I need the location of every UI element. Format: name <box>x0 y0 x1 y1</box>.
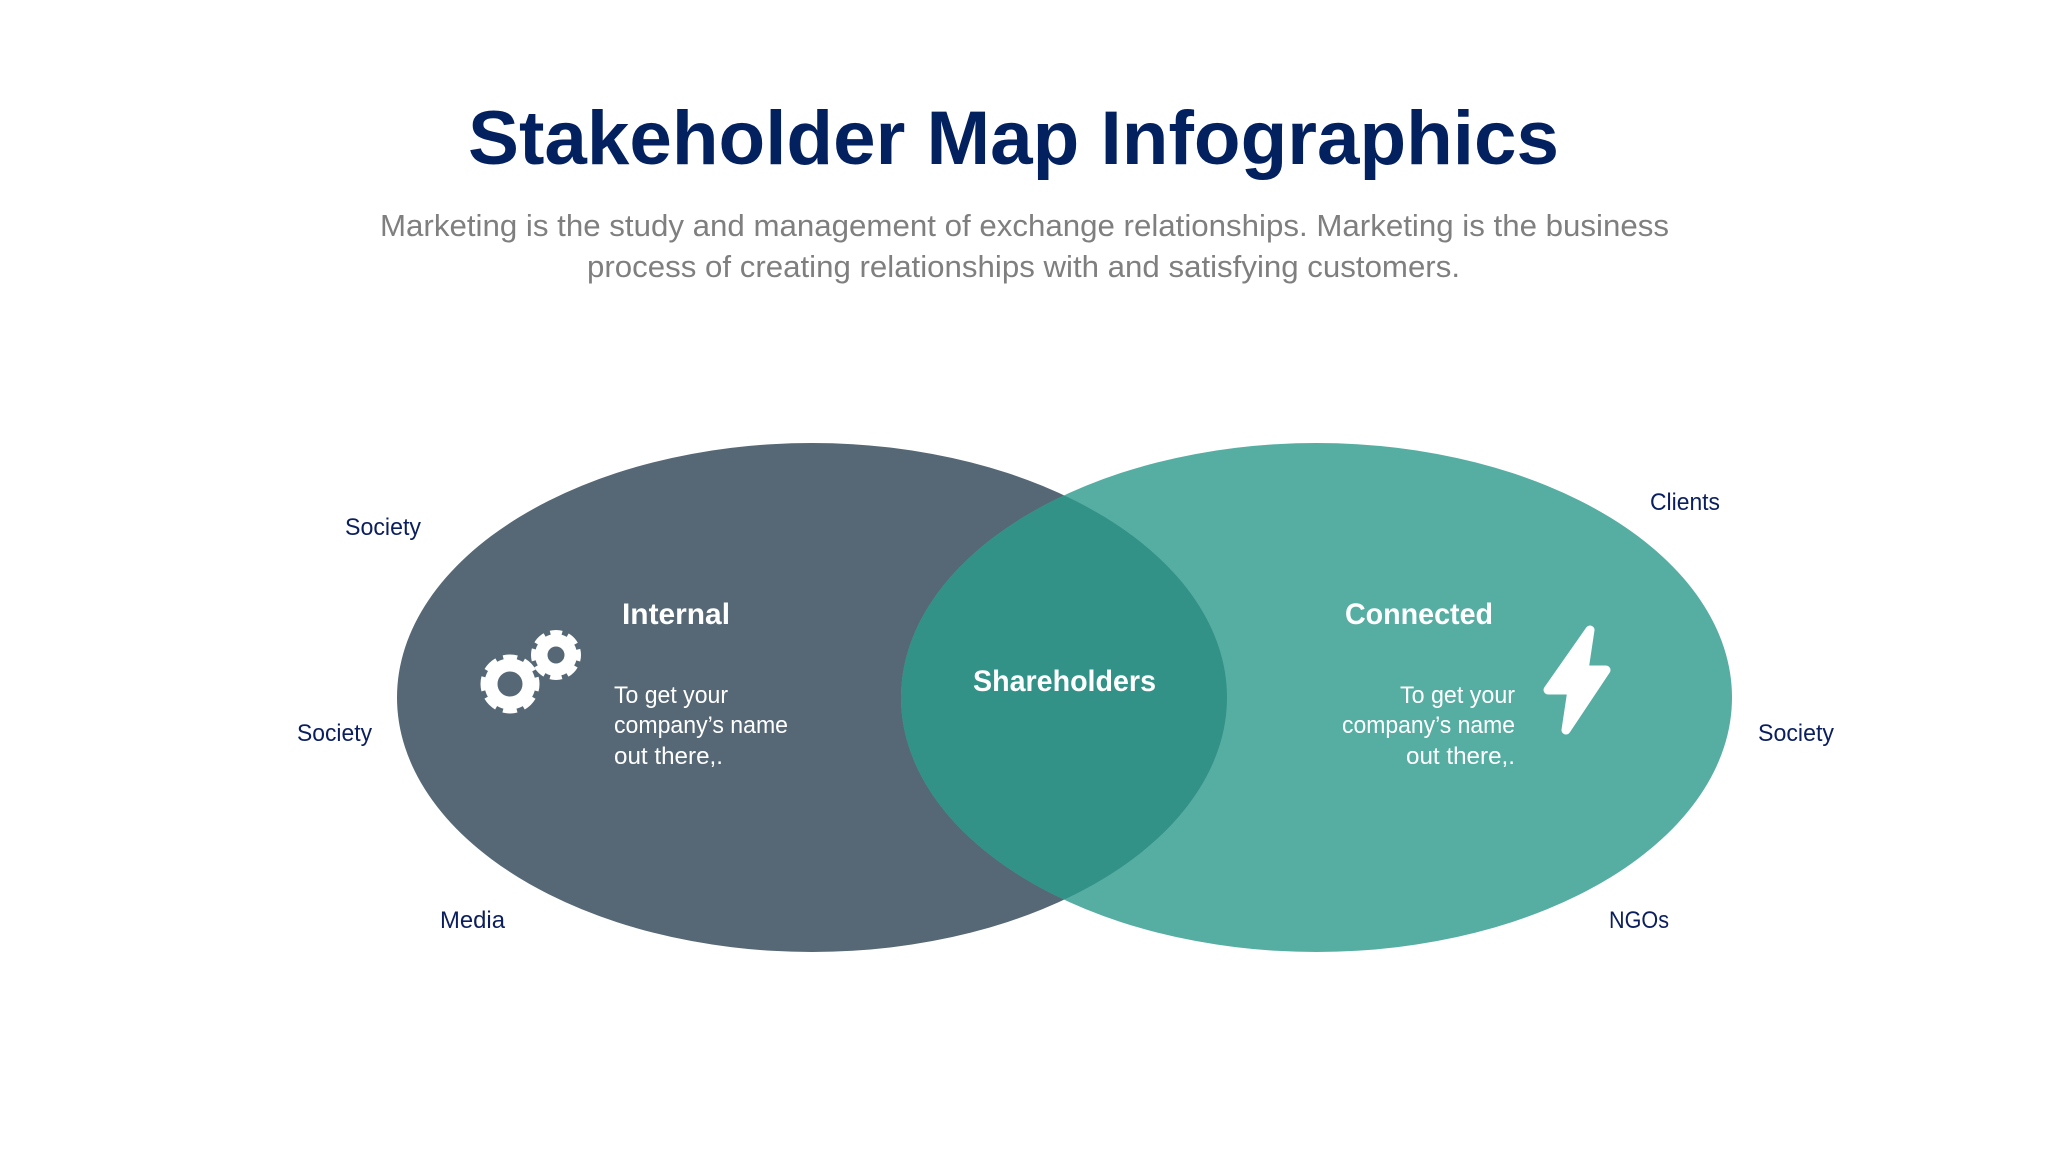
left ellipse: internal <box>397 443 1227 952</box>
text block: internal: To get your <box>614 682 728 709</box>
subtitle text block <box>380 208 1669 284</box>
title: Stakeholder Map Infographics <box>468 96 1559 181</box>
label: clients: Clients <box>1650 489 1720 516</box>
text block: internal <box>614 682 788 770</box>
heading: internal: Internal <box>622 598 730 631</box>
icon: gears <box>484 633 578 710</box>
text block: internal: company’s name <box>614 712 788 739</box>
label: NGOs: NGOs <box>1609 907 1669 934</box>
text block: connected: company’s name <box>1342 712 1515 739</box>
icon: lightning bolt <box>1548 630 1606 730</box>
text block: internal: out there,. <box>614 743 723 770</box>
label: society top left: Society <box>345 514 421 541</box>
overlap: shareholders <box>901 496 1227 900</box>
label: society right: Society <box>1758 720 1834 747</box>
subtitle text block: process of creating relationships with and satisfying customers. <box>587 249 1460 284</box>
subtitle text block: Marketing is the study and management of exchange relationships. Marketing is the business <box>380 208 1669 243</box>
label: society middle left: Society <box>297 720 372 747</box>
label: media: Media <box>440 907 506 934</box>
right ellipse: connected <box>901 443 1732 952</box>
text block: connected: To get your <box>1400 682 1515 709</box>
text block: connected <box>1342 682 1515 770</box>
heading: connected: Connected <box>1345 598 1493 631</box>
venn diagram <box>397 443 1732 952</box>
text block: connected: out there,. <box>1406 743 1515 770</box>
heading: shareholders: Shareholders <box>973 665 1156 698</box>
